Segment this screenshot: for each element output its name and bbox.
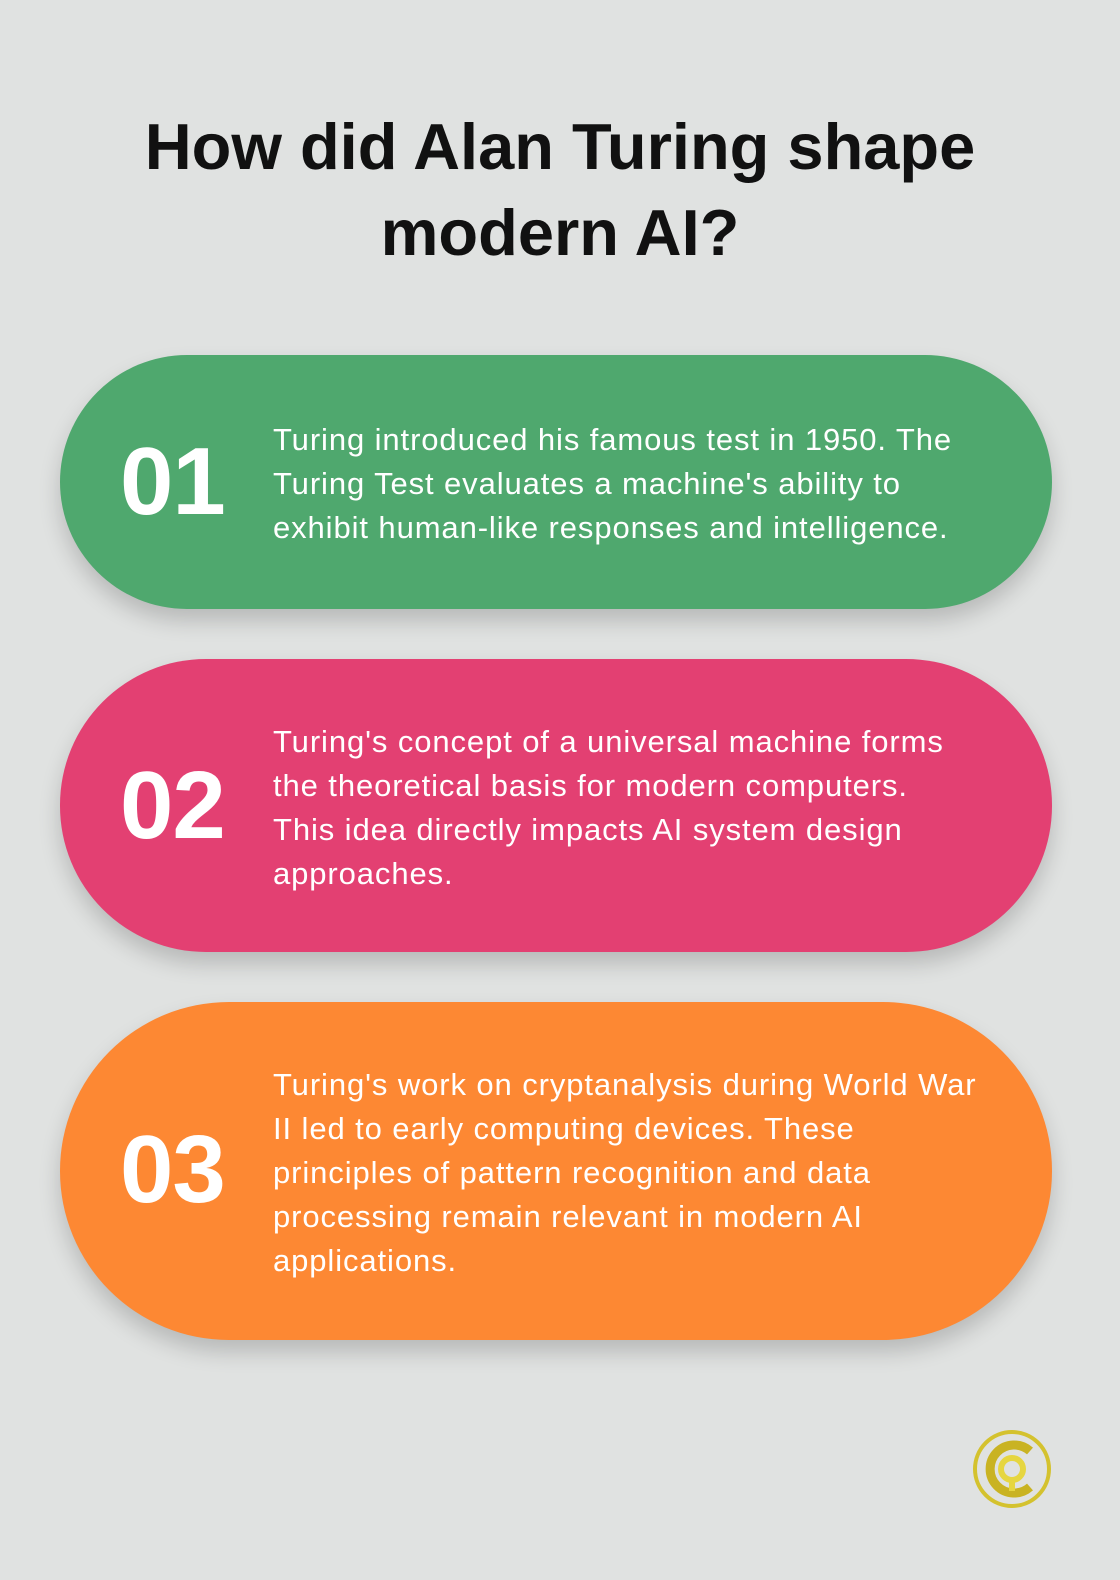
text 01: exhibit human-like responses and intelligence. (273, 510, 949, 545)
number 02: 02 (120, 752, 225, 859)
number 01: 01 (120, 428, 225, 535)
text 01: Turing introduced his famous test in 1950. The (273, 422, 952, 457)
text 03: Turing's work on cryptanalysis during World War (273, 1067, 976, 1102)
text 02: Turing's concept of a universal machine forms (273, 724, 944, 759)
text 03 (273, 1067, 976, 1278)
title: modern AI? (381, 196, 739, 269)
panel: 03 (60, 1002, 1052, 1340)
text 03: applications. (273, 1243, 457, 1278)
panel: 02 (60, 659, 1052, 952)
number 03: 03 (120, 1116, 225, 1223)
text 02: approaches. (273, 856, 454, 891)
text 02: the theoretical basis for modern computers. (273, 768, 908, 803)
text 02 (273, 724, 944, 891)
text 03: principles of pattern recognition and data (273, 1155, 871, 1190)
text 03: II led to early computing devices. These (273, 1111, 855, 1146)
title (145, 110, 975, 269)
text 01 (273, 422, 952, 545)
text 01: Turing Test evaluates a machine's ability to (273, 466, 901, 501)
panel: 01 (60, 355, 1052, 609)
icon: logo (973, 1430, 1051, 1508)
title: How did Alan Turing shape (145, 110, 975, 183)
text 02: This idea directly impacts AI system design (273, 812, 903, 847)
text 03: processing remain relevant in modern AI (273, 1199, 863, 1234)
